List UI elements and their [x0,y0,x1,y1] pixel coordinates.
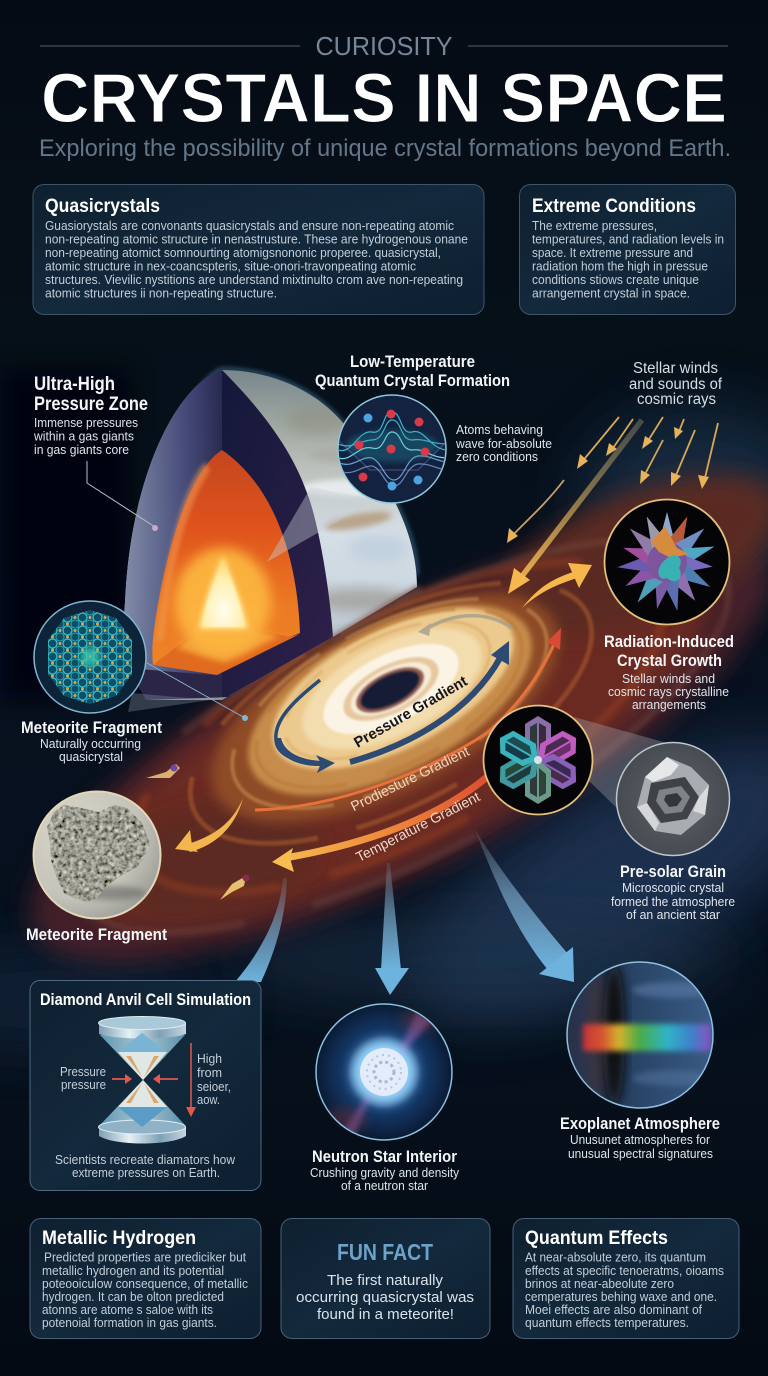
label: pre-solar grain [611,862,735,922]
long arrow 7 [698,423,718,489]
label: stellar winds [629,360,723,408]
label: meteorite fragment upper: Naturally occurring [40,736,141,751]
label: meteorite fragment upper: Meteorite Fragment [21,718,162,737]
title: CRYSTALS IN SPACE [41,59,727,137]
icon: small comet 1 [146,764,180,778]
grey upper arc [418,616,512,636]
thin arrow to disc [507,480,564,543]
body text: quasicrystals [45,218,468,300]
glowing core [175,548,271,656]
body text: metallic hydrogen: hydrogen. It can be olton predicted [42,1289,224,1304]
diagram labels: seioer, [197,1079,231,1094]
label: atoms behaving: Atoms behaving [456,422,543,437]
pressure gradient: arcs and label [275,616,512,773]
dark right facet [222,370,333,697]
diagram labels: Pressure [60,1064,106,1079]
arm top [525,716,551,760]
body text: metallic hydrogen: metallic hydrogen and its potential [42,1263,224,1278]
galaxy: accretion disc [0,441,768,1043]
callout wedge: below lattice circle [128,693,210,712]
body text: quantum effects: Moei effects are also dominant of [525,1302,702,1317]
label: prodiesture gradient: Prodiesture Gradient [348,743,472,814]
mantle floor [153,627,300,675]
temperature gradient arcs and labels [255,628,561,872]
label: pre-solar grain: Pre-solar Grain [620,862,726,881]
blue arrow: to exoplanet [475,830,574,982]
body text: quantum effects: cemperatures behing waxe and one. [525,1289,717,1304]
long arrow 5 [640,440,663,484]
pressure gradient label: Pressure Gradient [351,673,470,751]
label: meteorite fragment lower: Meteorite Fragment [26,925,167,944]
panel: quantum effects [513,1218,739,1338]
long arrow 4 [674,419,684,439]
circle: meteorite fragment [34,792,160,918]
heading: metallic hydrogen: Metallic Hydrogen [42,1228,196,1249]
panel: fun fact [281,1218,490,1338]
label: neutron star interior: of a neutron star [341,1178,429,1193]
label: stellar winds: Stellar winds [633,360,718,377]
label: pre-solar grain: of an ancient star [626,907,721,922]
leader line: ultra-high pressure zone [87,461,158,531]
body text: fun fact: occurring quasicrystal was [296,1289,474,1306]
circle: radiation crystal [604,500,730,624]
heading: extreme conditions: Extreme Conditions [532,196,696,217]
label: ultra-high pressure zone: within a gas giants [33,428,134,444]
body text: extreme conditions: radiation hom the high in pressue [532,258,708,274]
label: stellar winds: and sounds of [629,376,723,393]
label: radiation-induced crystal growth: Stellar winds and [622,671,715,686]
arm upper left [493,727,544,771]
diagram: diamond anvil [98,1016,186,1144]
body text: quasicrystals: non-repeating atomict somnourting atomigsnononic properee. quasicrystal, [45,245,441,260]
circle: neutron star [316,1004,452,1140]
mantle light left edge [156,462,210,640]
heading: quantum effects: Quantum Effects [525,1228,668,1249]
circle: hexagonal crystal [484,706,592,814]
panel: extreme conditions [520,184,736,314]
label: meteorite fragment upper: quasicrystal [59,749,123,764]
thin orange arc with red arrow [255,628,561,810]
long arrow 2 [606,419,633,456]
body text: extreme conditions [532,218,724,300]
arrow: to meteorite fragment [175,798,243,852]
label: ultra-high pressure zone: Pressure Zone [34,394,148,415]
leader line: quasicrystal sample [147,663,248,721]
label: exoplanet atmosphere [560,1114,720,1161]
callout wedge: hex crystal to pre-solar grain [574,717,667,813]
label: ultra-high pressure zone: Ultra-High [34,374,115,395]
arm bottom [525,760,551,804]
panel: diamond anvil cell simulation [30,980,261,1190]
navy arrow right [350,641,509,762]
body text: extreme conditions: arrangement crystal in space. [532,286,690,300]
body text: metallic hydrogen: poteooiculow consequence, of metallic [42,1276,248,1291]
body text: quantum effects: quantum effects temperatures. [525,1315,689,1330]
label: pre-solar grain: formed the atmosphere [611,894,735,909]
label: low-temperature quantum crystal formation [315,352,510,390]
heading: diamond anvil: Diamond Anvil Cell Simulation [40,991,251,1009]
arm lower left [493,749,544,793]
circle: quasicrystal lattice [34,601,146,713]
body text: extreme conditions: space. It extreme pressure and [532,245,693,260]
navy arrow left [275,680,335,773]
label: ultra-high pressure zone: in gas giants core [34,442,129,457]
diagram labels: High [197,1051,222,1066]
body text: quantum effects [525,1250,724,1330]
body text: fun fact: found in a meteorite! [317,1306,454,1323]
label: exoplanet atmosphere: Unusunet atmospheres for [570,1132,711,1147]
stellar wind arrows [507,417,718,608]
heading: quasicrystals: Quasicrystals [45,196,160,217]
long arrow 1 [577,417,619,469]
callout wedge: planet core to quantum circle [267,487,375,562]
heading: fun fact: FUN FACT [337,1239,433,1265]
label: radiation-induced crystal growth [604,632,734,712]
label: radiation-induced crystal growth: Crystal Growth [617,651,722,670]
dark lower shell [128,668,230,700]
planet cutaway: gas giant [120,360,420,705]
left shell [124,370,222,692]
label: low-temperature quantum crystal formation: Low-Temperature [350,352,475,371]
nebula glow behind diagram [0,370,768,1073]
body text: quantum effects: At near-absolute zero, its quantum [525,1250,706,1264]
swoosh arrow to crystal [522,563,592,608]
panel: metallic hydrogen [30,1218,261,1338]
blue arrow: to neutron star [375,863,409,995]
caption [55,1152,236,1180]
thick long arrow [508,420,642,594]
body text: metallic hydrogen: potenoial formation in gas giants. [42,1315,217,1330]
label: neutron star interior: Crushing gravity and density [310,1165,459,1180]
label: meteorite fragment upper [21,718,162,764]
body text: quasicrystals: atomic structure in nex-coancspteris, situe-onori-travonpeating atomic [45,258,416,274]
long arrow 3 [642,417,663,449]
caption: extreme pressures on Earth. [72,1165,220,1180]
label: ultra-high pressure zone [33,374,148,457]
diagram labels [60,1051,231,1107]
arm lower right [532,749,583,793]
pressure arrows [112,1043,196,1117]
label: pre-solar grain: Microscopic crystal [622,880,724,895]
label: atoms behaving: wave for-absolute [455,436,552,451]
label: stellar winds: cosmic rays [637,391,716,408]
label: exoplanet atmosphere: Exoplanet Atmosphere [560,1114,720,1133]
label: radiation-induced crystal growth: arrangements [632,697,706,712]
orange mantle [152,450,300,673]
label: atoms behaving: zero conditions [456,449,538,464]
circle: quantum crystal [338,395,448,503]
body text: quantum effects: brinos at near-abeolute zero [525,1276,674,1291]
circle: exoplanet atmosphere [567,962,713,1108]
body text: extreme conditions: temperatures, and radiation levels in [532,232,724,246]
soft boundary to the disc [333,588,420,640]
body text: extreme conditions: conditions stiows create unique [532,272,699,287]
circle: pre-solar grain [616,742,730,856]
caption: Scientists recreate diamators how [55,1152,236,1167]
icon: small comet 2 [220,874,250,900]
diagram labels: aow. [197,1092,220,1107]
label: temperature gradient: Temperature Gradient [353,788,482,865]
label: neutron star interior [310,1147,459,1193]
black hole [349,658,431,722]
body text: quasicrystals: structures. Vievilic nystitions are understand mixtinulto crom ave non-repeating [45,272,463,287]
long arrow 6 [671,430,695,486]
body text: metallic hydrogen [42,1250,248,1330]
header: kicker: CURIOSITY [316,31,452,61]
body text: metallic hydrogen: atonns are atome s saloe with its [42,1302,213,1317]
diagram labels: pressure [61,1077,106,1092]
blue arrow: to diamond anvil [235,878,287,982]
label: neutron star interior: Neutron Star Interior [312,1147,457,1166]
temperature arrow [272,770,495,872]
planet rim glow [190,369,417,575]
swirl streaks [27,464,768,1008]
label: radiation-induced crystal growth: Radiation-Induced [604,632,734,651]
body text: quasicrystals: atomic structures ii non-repeating structure. [45,286,277,300]
panel: quasicrystals [33,184,484,314]
body text: metallic hydrogen: Predicted properties are prediciker but [44,1250,246,1264]
body text: quasicrystals: Guasiorystals are convonants quasicrystals and ensure non-repeating atomic [45,218,454,233]
label: ultra-high pressure zone: Immense pressures [34,415,138,430]
body text: fun fact: The first naturally [327,1272,443,1289]
label: exoplanet atmosphere: unusual spectral signatures [568,1146,713,1161]
diagram labels: from [197,1065,222,1080]
body text: fun fact [296,1272,474,1323]
label: low-temperature quantum crystal formation: Quantum Crystal Formation [315,371,510,390]
arm upper right [532,727,583,771]
body text: quantum effects: effects at specific tenoeratms, oioams [525,1263,724,1278]
subtitle: Exploring the possibility of unique crystal formations beyond Earth. [39,135,731,162]
planet surface with bands [120,360,420,705]
label: atoms behaving [455,422,552,464]
label: radiation-induced crystal growth: cosmic rays crystalline [608,684,729,699]
body text: quasicrystals: non-repeating atomic structure in nenastrusture. These are hydrogenous onane [45,232,468,246]
body text: extreme conditions: The extreme pressures, [532,218,657,233]
meteorite rock [47,805,150,902]
